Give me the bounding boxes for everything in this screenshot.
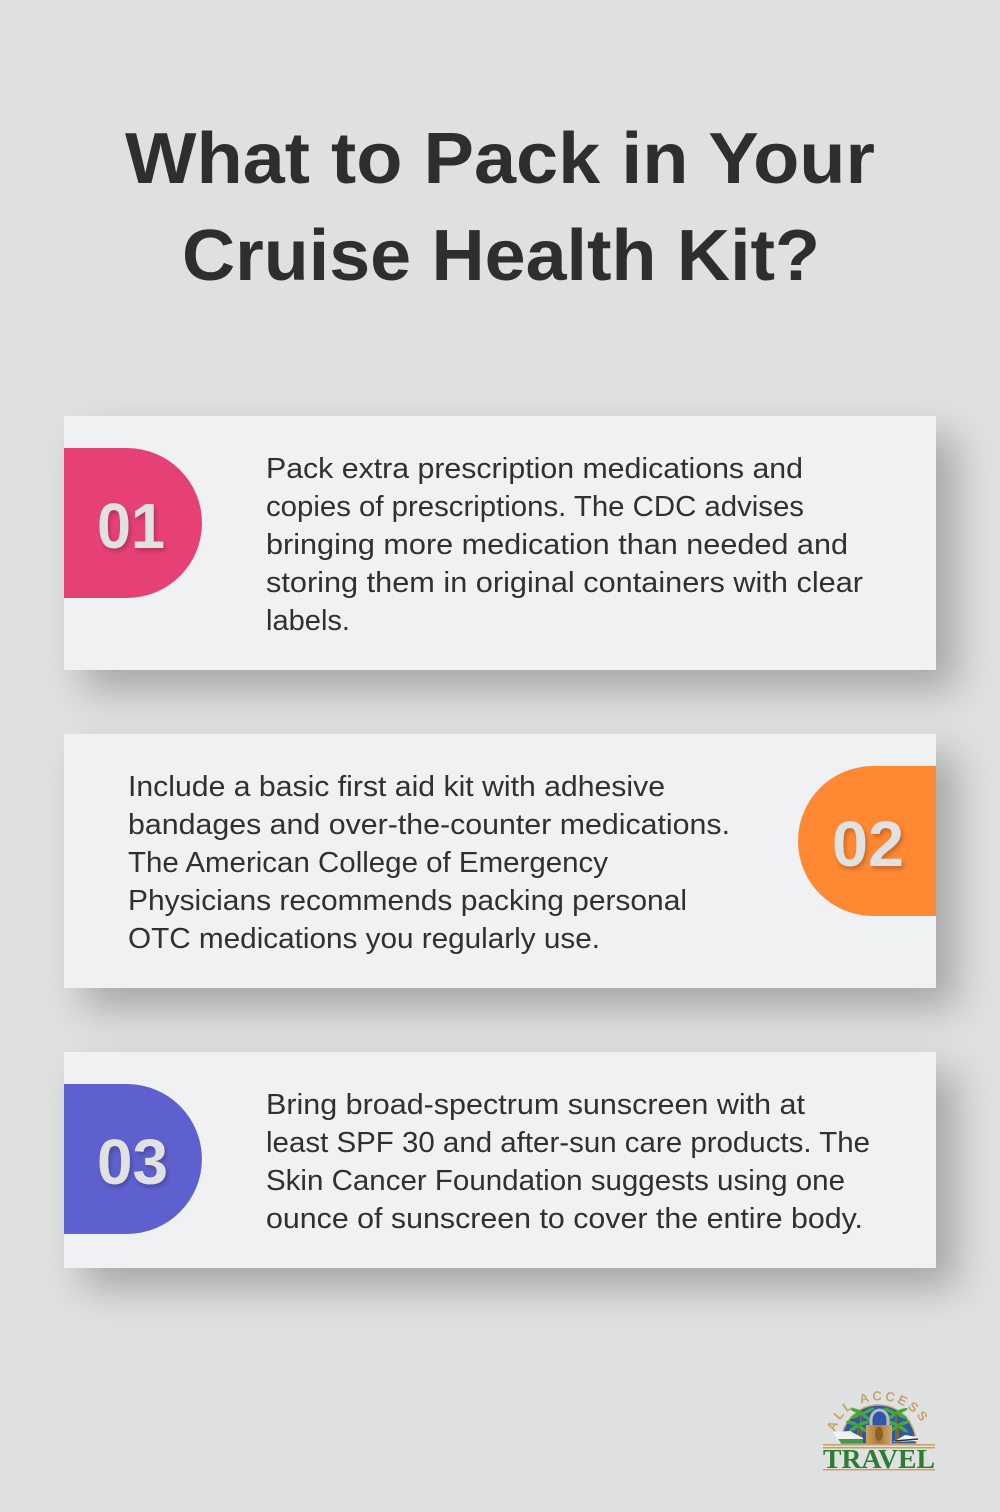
text block: card 2: Physicians recommends packing personal (128, 885, 687, 917)
logo plane (893, 1435, 918, 1442)
text block: card 1: labels. (266, 605, 350, 637)
badge: 02 (798, 766, 936, 916)
text block: card 1 (266, 453, 863, 637)
text block: card 1: storing them in original containers with clear (266, 567, 863, 599)
logo wordmark: TRAVEL (823, 1444, 935, 1474)
text block: card 1: Pack extra prescription medications and (266, 453, 803, 485)
logo padlock body (866, 1425, 892, 1444)
text block: card 3 (266, 1089, 870, 1235)
logo globe dome (841, 1405, 916, 1444)
text block: card 3: ounce of sunscreen to cover the entire body. (266, 1203, 863, 1235)
logo: All Access Travel (823, 1391, 935, 1474)
badge: 01: 01 (97, 490, 165, 562)
badge: 01 (64, 448, 202, 598)
logo rules (823, 1444, 935, 1446)
text block: card 1: bringing more medication than needed and (266, 529, 848, 561)
logo ship (833, 1431, 863, 1443)
title (125, 119, 875, 296)
badge: 02: 02 (832, 808, 904, 880)
badge: 03 (64, 1084, 202, 1234)
title: What to Pack in Your (125, 119, 875, 199)
text block: card 1: copies of prescriptions. The CDC advises (266, 491, 804, 523)
logo padlock shackle (871, 1410, 888, 1426)
panel: card 1 background (64, 416, 936, 670)
text block: card 2: OTC medications you regularly use. (128, 923, 600, 955)
text block: card 3: Bring broad-spectrum sunscreen with at (266, 1089, 805, 1121)
text block: card 2 (128, 771, 730, 955)
text block: card 2: Include a basic first aid kit with adhesive (128, 771, 665, 803)
text block: card 3: Skin Cancer Foundation suggests using one (266, 1165, 845, 1197)
panel: card 2 background (64, 734, 936, 988)
title: Cruise Health Kit? (182, 216, 820, 296)
logo palms (846, 1406, 910, 1443)
panel: card 3 background (64, 1052, 936, 1268)
text block: card 2: bandages and over-the-counter medications. (128, 809, 730, 841)
text block: card 3: least SPF 30 and after-sun care products. The (266, 1127, 870, 1159)
logo arc text: ALL ACCESS (828, 1391, 927, 1432)
badge: 03: 03 (97, 1126, 168, 1198)
text block: card 2: The American College of Emergency (128, 847, 608, 879)
